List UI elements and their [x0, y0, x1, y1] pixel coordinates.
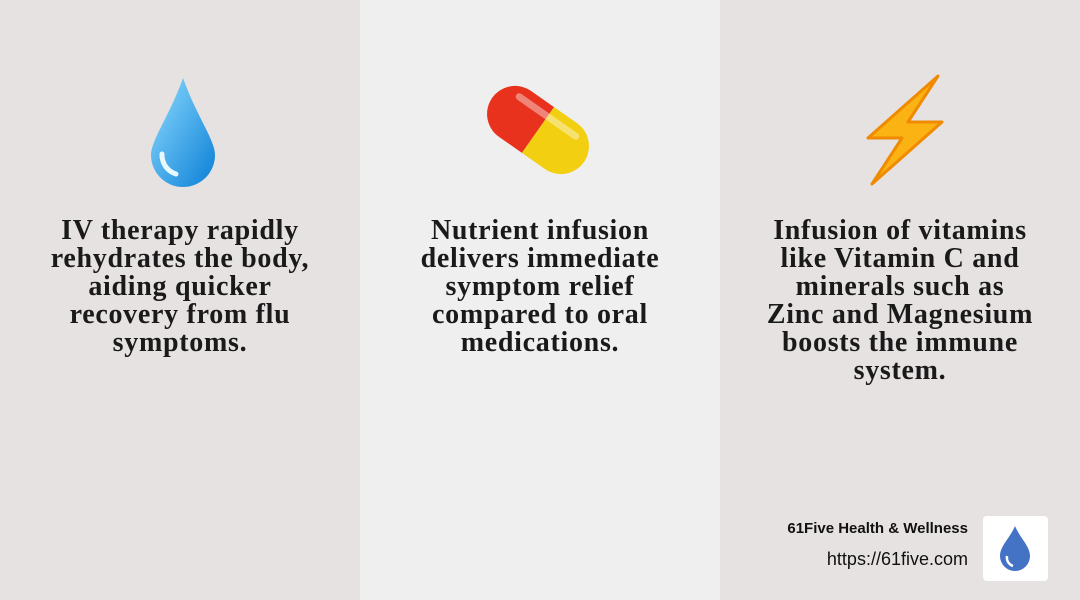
text: rehydration: rehydrates the body,	[51, 243, 309, 274]
icon: pill	[487, 86, 589, 174]
text: immune boost: Infusion of vitamins	[773, 215, 1027, 246]
text: nutrient infusion: symptom relief	[446, 271, 634, 302]
text: nutrient infusion: delivers immediate	[421, 243, 659, 274]
logo	[983, 516, 1048, 581]
text: immune boost	[767, 215, 1033, 386]
icon: water drop	[151, 78, 215, 187]
text: immune boost: boosts the immune	[782, 327, 1018, 358]
text: rehydration: IV therapy rapidly	[61, 215, 299, 246]
text: immune boost: system.	[854, 355, 946, 386]
text: rehydration	[51, 215, 309, 358]
text: immune boost: minerals such as	[796, 271, 1004, 302]
text: rehydration: recovery from flu	[70, 299, 290, 330]
panel: rehydration	[0, 0, 360, 600]
brand url: https://61five.com	[827, 549, 968, 569]
panel: immune boost	[720, 0, 1080, 600]
text: rehydration: aiding quicker	[88, 271, 272, 302]
text: rehydration: symptoms.	[113, 327, 247, 358]
brand footer	[787, 516, 1048, 581]
text: immune boost: Zinc and Magnesium	[767, 299, 1033, 330]
brand name: 61Five Health & Wellness	[787, 520, 968, 537]
text: nutrient infusion: compared to oral	[432, 299, 648, 330]
panel: nutrient infusion	[360, 0, 720, 600]
text: nutrient infusion: Nutrient infusion	[431, 215, 649, 246]
text: nutrient infusion	[421, 215, 659, 358]
icon: lightning	[866, 74, 944, 186]
text: nutrient infusion: medications.	[461, 327, 619, 358]
text: immune boost: like Vitamin C and	[780, 243, 1019, 274]
